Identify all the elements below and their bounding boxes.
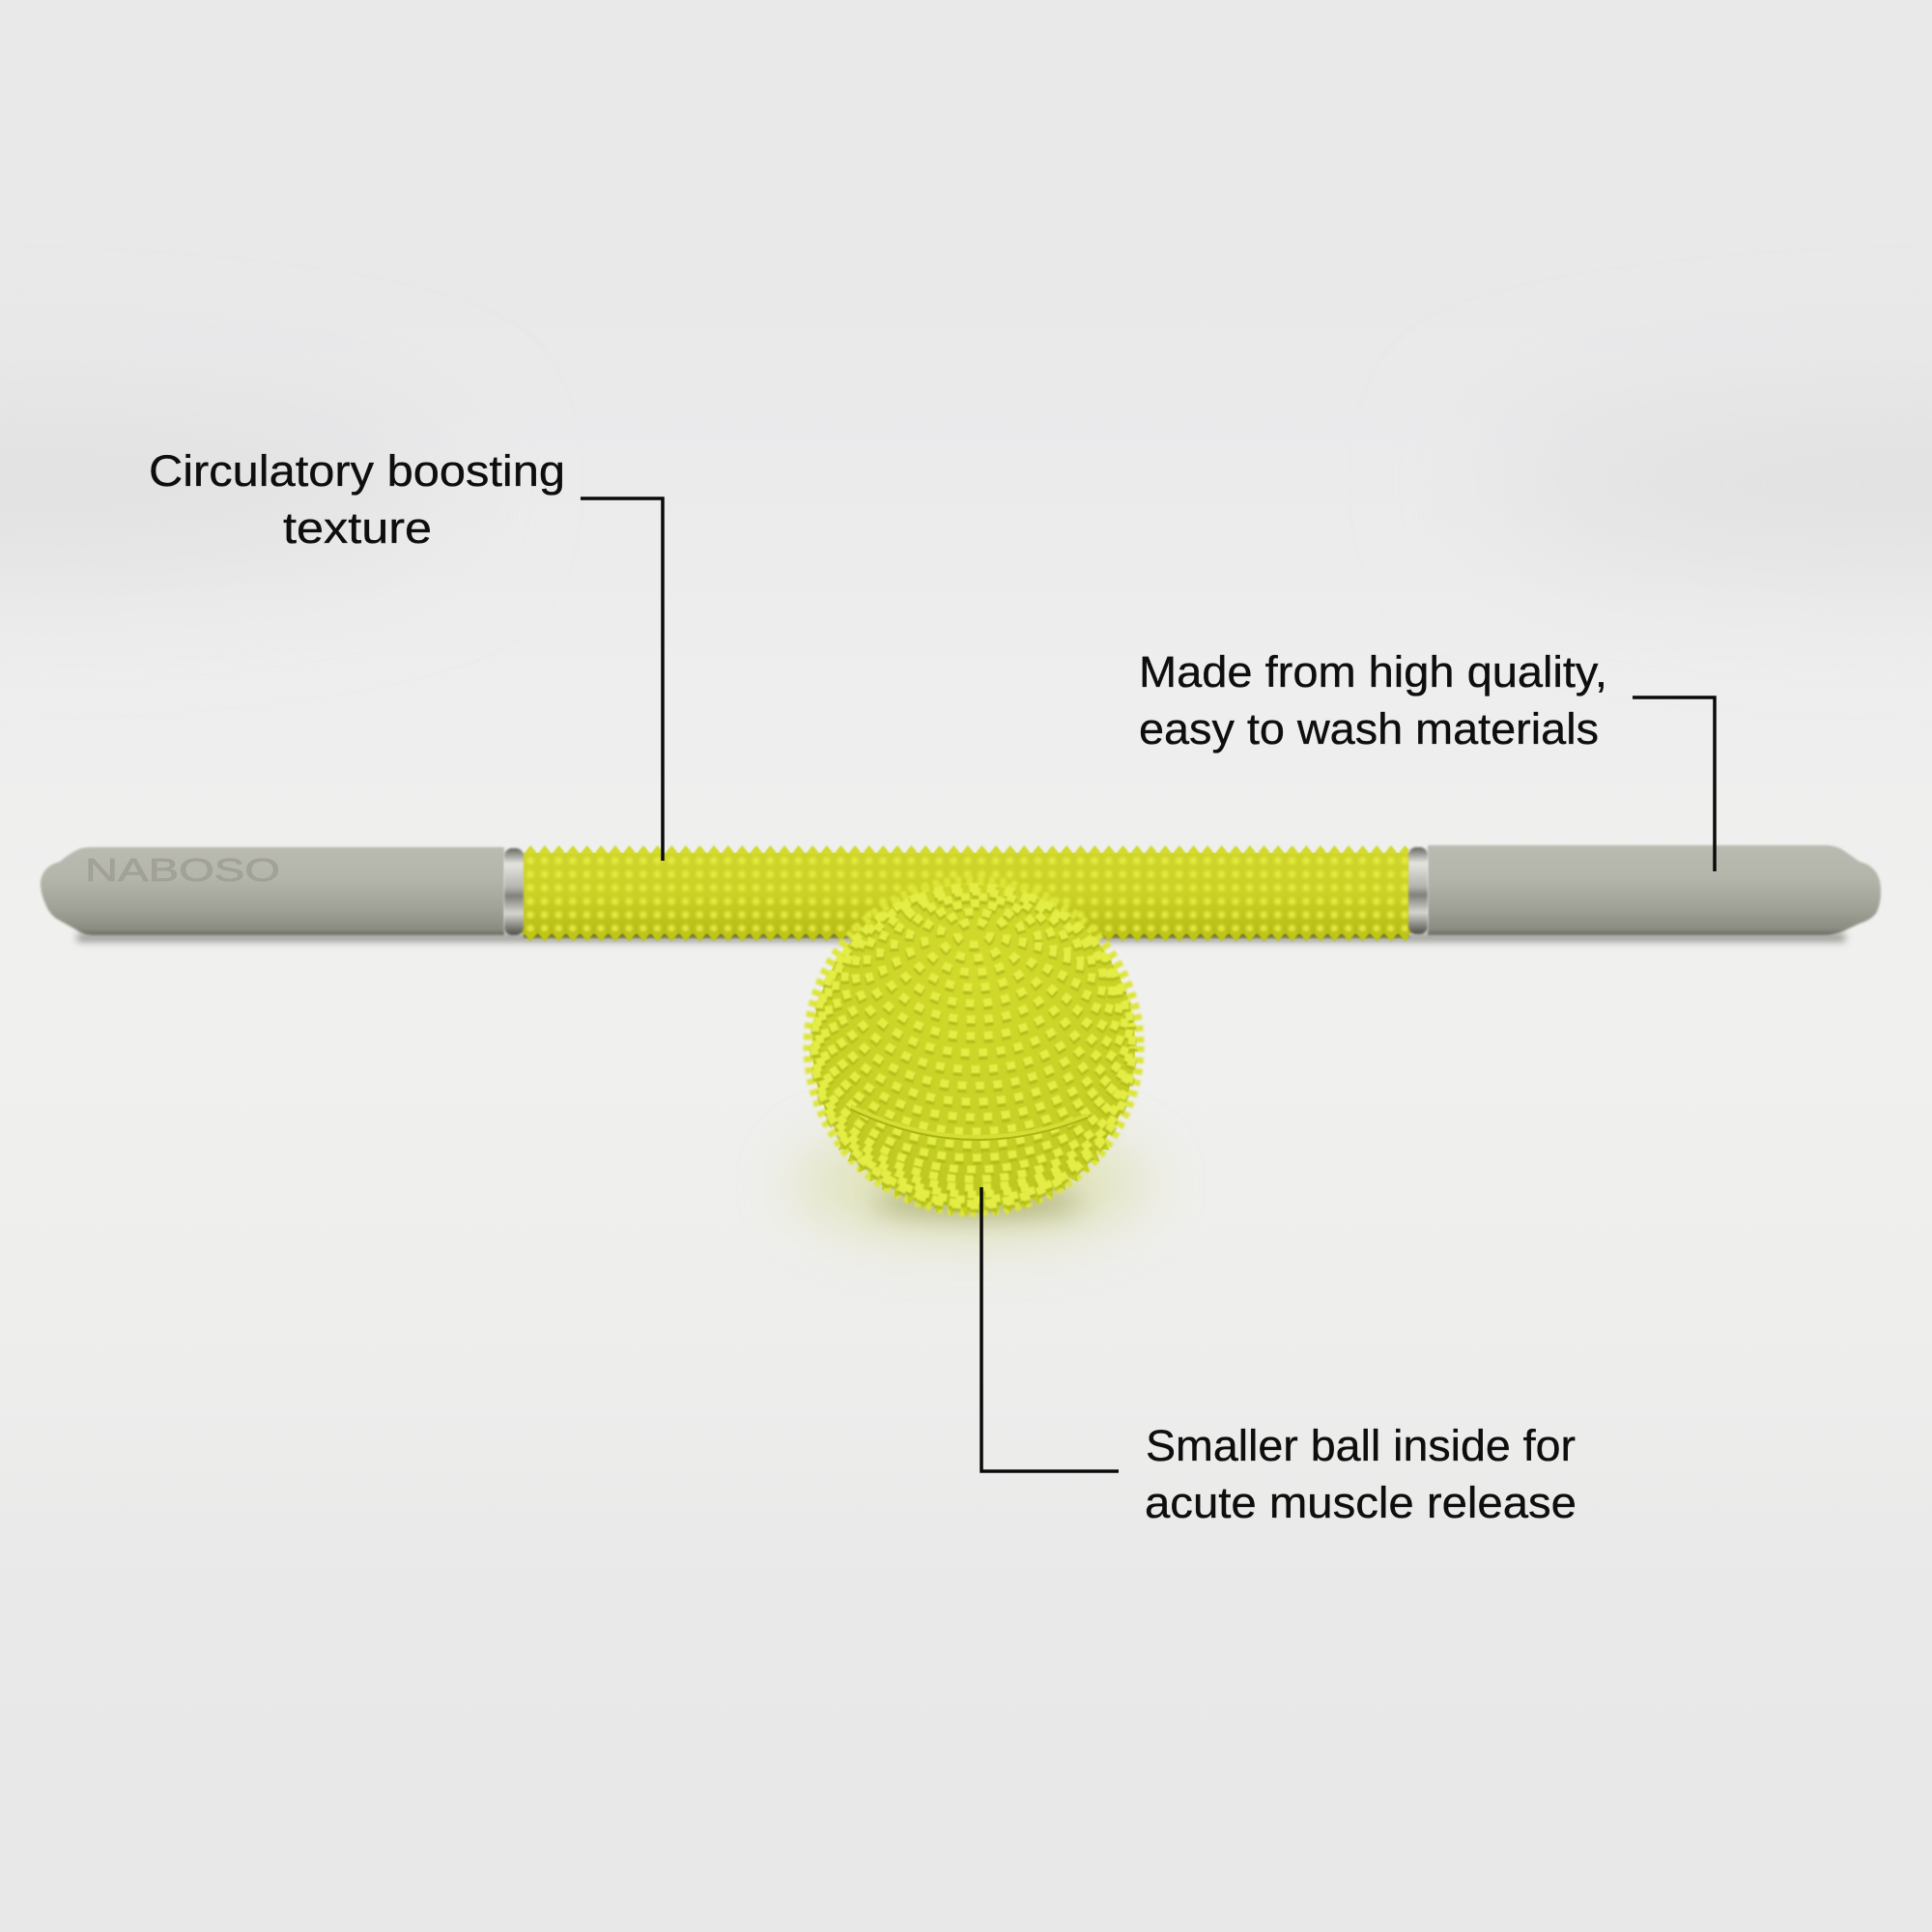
- ball shadow: [792, 1125, 1150, 1241]
- ball bottom spikes: [838, 1137, 1109, 1217]
- bar shadow: [77, 933, 1845, 942]
- label text: acute muscle release: [1145, 1478, 1577, 1527]
- label text: texture: [283, 503, 432, 553]
- spike tips: [814, 887, 1133, 1206]
- left metal ring: [504, 848, 524, 935]
- callout: circulatory texture: [149, 446, 663, 861]
- right grey handle: [1428, 845, 1881, 935]
- leader line: [981, 1187, 1119, 1471]
- label text: Smaller ball inside for: [1146, 1421, 1576, 1470]
- spike shading: [814, 890, 1133, 1208]
- label text: easy to wash materials: [1139, 704, 1599, 753]
- label text: [149, 446, 565, 553]
- ball silhouette spikes: [810, 882, 1138, 1210]
- leader line: [1633, 697, 1715, 871]
- product: spiky ball: [810, 882, 1138, 1217]
- leader line: [581, 498, 663, 861]
- left grey handle: [41, 847, 504, 935]
- label text: [1145, 1421, 1577, 1527]
- right metal ring: [1408, 847, 1428, 934]
- callout: inner ball: [981, 1187, 1577, 1527]
- label text: [1139, 647, 1607, 753]
- textured yellow shaft: [520, 845, 1412, 942]
- brand name on handle: NABOSO: [85, 852, 280, 888]
- label text: Circulatory boosting: [149, 446, 565, 496]
- seam between ball halves: [850, 1107, 1088, 1140]
- ball body: [812, 885, 1135, 1208]
- label text: Made from high quality,: [1139, 647, 1607, 696]
- callout: materials: [1139, 647, 1715, 871]
- product: massage bar: [41, 845, 1881, 942]
